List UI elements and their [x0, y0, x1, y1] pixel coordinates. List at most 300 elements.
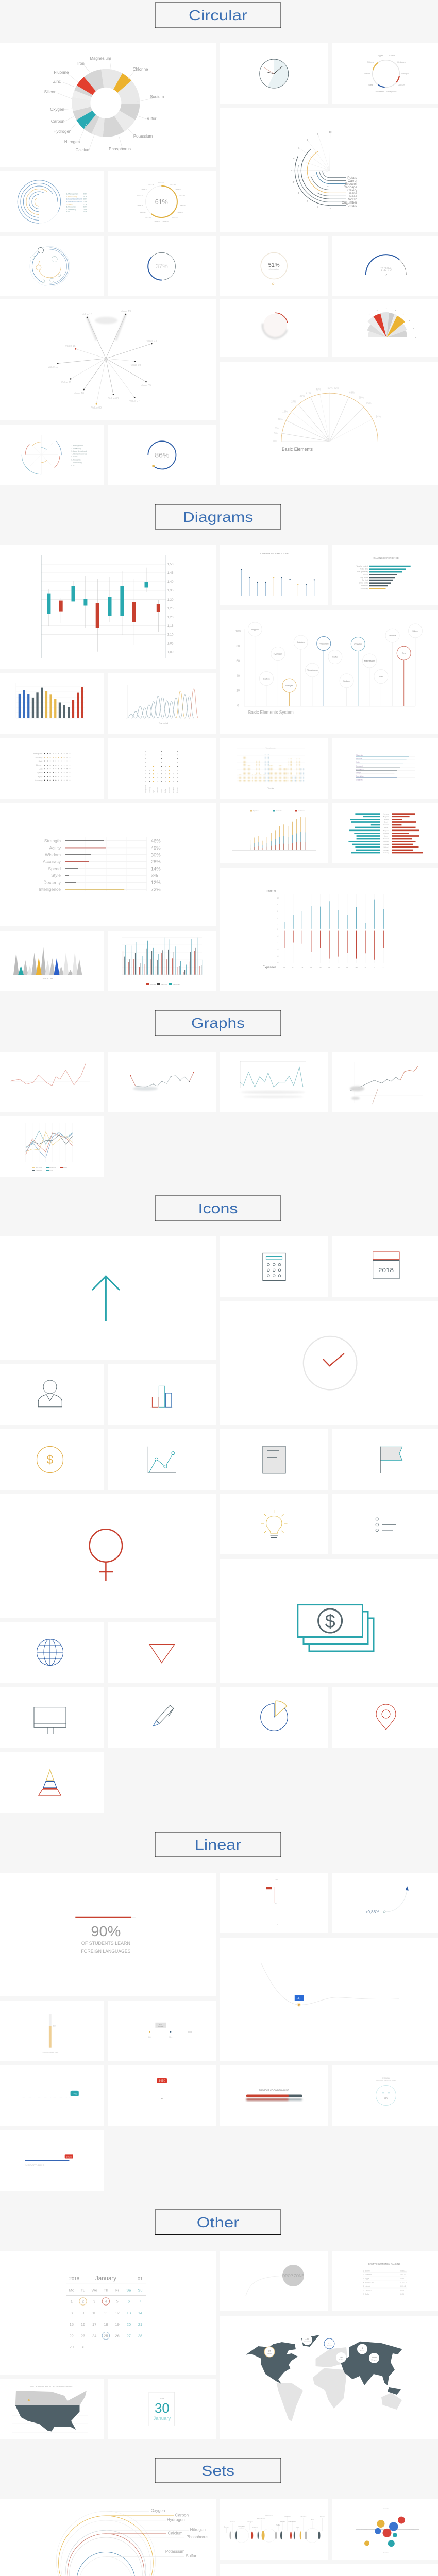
panel: +0,88% trend arrow: [332, 1873, 438, 1933]
panel: element lens timeline: Sodium: [280, 2520, 285, 2522]
panel: attribute percentage bars: [0, 803, 216, 926]
panel: world map: Mongolia: [371, 2359, 377, 2361]
panel: bubble quadrant chart: Growth: [383, 2507, 389, 2510]
panel: calendar January 2018: 6: [128, 2299, 130, 2304]
panel: gaming experience bars: Reactions: [361, 585, 368, 587]
heading: Linear: [155, 1832, 281, 1857]
panel: basic elements gauge: Basic Elements: [282, 447, 313, 452]
panel: butterfly bar chart: Serbia: [384, 826, 388, 828]
panel: income and expenses diverging bars: 4: [277, 917, 278, 919]
panel: element lens timeline: Carbon: [230, 2521, 235, 2523]
panel: butterfly bar chart: [332, 803, 438, 863]
panel: basic elements system balloons: Sulfur: [332, 655, 338, 658]
panel: curve with highlighted value: [220, 1938, 438, 2061]
panel: 61% ring with value labels: Value 02: [170, 184, 176, 186]
panel: 2018 calendar icon: [332, 1236, 438, 1297]
panel: cryptocurrency ranking: $0.55: [400, 2278, 404, 2280]
heading: Diagrams: [155, 504, 281, 529]
panel: basic elements system balloons: [220, 610, 438, 734]
panel: concentric vegetable arcs: [220, 108, 438, 232]
panel: 61% ring with value labels: Value 09: [154, 220, 160, 222]
panel: radial stems with value dots: Value 14: [146, 340, 157, 343]
panel: labelled line bars: Sales: [356, 761, 360, 764]
panel: radial progress rings with legend: 5. Sales: [66, 203, 73, 205]
panel: cryptocurrency ranking: CRYPTOCURRENCY RANKING: [368, 2263, 401, 2265]
panel: income and expenses diverging bars: -8: [277, 955, 279, 957]
panel: three series column chart: [108, 931, 216, 991]
panel: calendar January 2018: We: [92, 2287, 97, 2293]
panel: triangle column chart: [0, 931, 104, 991]
panel: attribute percentage bars: Wisdom: [45, 852, 61, 857]
panel: radial progress rings with legend: 76%: [83, 201, 87, 203]
panel: stacked money icon: [220, 1559, 438, 1683]
panel: multicolour bar chart: [0, 673, 104, 734]
heading: Icons: Icons: [198, 1200, 238, 1216]
panel: gaming experience bars: Community: [360, 587, 368, 589]
panel: income and expenses diverging bars: 10: [364, 967, 366, 969]
panel: calendar January 2018: 14: [138, 2311, 142, 2315]
panel: 37% ring: [108, 236, 216, 296]
panel: radial progress rings with legend: 8. IT: [66, 211, 70, 213]
panel: stacked spike chart: [220, 803, 328, 863]
panel: concentric vegetable arcs: Peas: [349, 195, 358, 198]
panel: basic elements gauge: 69%: [359, 396, 364, 399]
panel: concentric vegetable arcs: Cucumber: [342, 201, 358, 205]
panel: company income stem chart: COMPANY INCOME CHART: [259, 552, 290, 555]
panel: donut of elements: Sodium: [150, 95, 164, 99]
heading: Diagrams: Diagrams: [183, 509, 253, 525]
panel: dot matrix rows: Dexterity: [36, 756, 43, 758]
panel: dot matrix rows: Agility: [38, 775, 43, 777]
panel: concentric vegetable arcs: 3: [298, 192, 299, 194]
panel: vertical progress marker: 50: [275, 1902, 277, 1904]
panel: basic elements system balloons: Potassium: [319, 642, 329, 645]
panel: concentric vegetable arcs: 4: [293, 181, 294, 183]
panel: attribute percentage bars: 28%: [151, 859, 161, 865]
panel: donut of elements: Hydrogen: [54, 129, 71, 134]
panel: labelled line bars: [332, 738, 438, 799]
panel: project crowdfunding bar: [220, 2065, 328, 2126]
panel: radial stems with value dots: Value 15: [82, 313, 92, 316]
panel: radial stems with value dots: [0, 299, 216, 420]
panel: radial ring with element labels: Phosphorus: [386, 91, 397, 93]
panel: date card: 2018: [160, 2397, 165, 2400]
panel: attribute percentage bars: Style: [51, 873, 61, 878]
panel: calendar January 2018: 4: [105, 2299, 107, 2304]
panel: down triangle icon: [108, 1622, 216, 1683]
panel: radial stems with value dots: Value 12: [48, 366, 58, 369]
panel: bell curve chart: Time period: [159, 722, 168, 724]
panel: element lens timeline: Nitrogen: [247, 2521, 253, 2523]
panel: candlestick chart: 1,40: [167, 581, 174, 584]
panel: calendar January 2018: Fr: [115, 2287, 120, 2293]
panel: world map: Canada: [267, 2352, 272, 2354]
panel: date card: 30: [155, 2400, 170, 2416]
panel: smooth red line graph: [0, 1052, 104, 1112]
panel: radial stems with value dots: Value 11: [61, 381, 71, 384]
panel: world map: Turkey: [339, 2359, 344, 2361]
panel: income and expenses diverging bars: 08: [346, 967, 348, 969]
panel: nested circles of elements: Sulfur: [186, 2554, 197, 2558]
panel: basic elements gauge: 27%: [291, 401, 297, 404]
panel: income and expenses diverging bars: 6: [277, 910, 278, 912]
panel: calendar January 2018: Tu: [81, 2287, 85, 2293]
panel: range line with average: Average: [158, 2025, 164, 2027]
panel: concentric vegetable arcs: Beans: [348, 192, 358, 195]
panel: radial ring with element labels: Carbon: [389, 55, 395, 57]
panel: clock gauge: [220, 43, 328, 104]
panel: bubble quadrant chart: Low value: [361, 2528, 368, 2530]
panel: basic elements gauge: 63%: [349, 391, 355, 394]
heading: Circular: Circular: [189, 7, 247, 23]
panel: segmented radial arcs with legend: 2. Marketing: [71, 447, 81, 449]
panel: calendar January 2018: [0, 2251, 216, 2375]
panel: stacked spike chart: Unstable: [276, 810, 282, 812]
panel: 72% semicircular gauge: ♂: [384, 274, 388, 277]
panel: candlestick chart: 1,20: [167, 616, 174, 619]
panel: calendar January 2018: 18: [104, 2322, 108, 2327]
panel: basic elements system balloons: Calcium: [297, 641, 305, 643]
panel: concentric vegetable arcs: Potato: [347, 176, 357, 180]
panel: radial stems with value dots: Value 10: [74, 392, 84, 395]
panel: basic elements gauge: 5%: [274, 432, 278, 435]
panel: concentric vegetable arcs: 9: [317, 133, 319, 135]
panel: dollar coin icon: [0, 1429, 104, 1490]
heading: Graphs: [155, 1010, 281, 1036]
panel: dot matrix rows: Accuracy: [35, 779, 43, 782]
panel: 61% ring with value labels: Value 06: [177, 211, 183, 213]
panel: 61% ring with value labels: Value 11: [140, 211, 146, 213]
panel: multi-series line graph: Profit: [63, 1166, 67, 1168]
panel: donut of elements: Carbon: [51, 119, 64, 124]
panel: radial progress rings with legend: 64%: [83, 206, 87, 208]
panel: world map: Greenland: [304, 2341, 311, 2343]
panel: world map: Sweden: [327, 2345, 332, 2347]
panel: concentric vegetable arcs: 5: [291, 169, 293, 172]
panel: radial stems with value dots: Value 05: [141, 384, 151, 387]
heading: Sets: Sets: [201, 2463, 234, 2479]
panel: calendar January 2018: 1: [71, 2299, 73, 2304]
panel: 51% of population ring: of population: [269, 268, 279, 270]
panel: segmented radial arcs with legend: 8. IT: [71, 465, 75, 467]
panel: radial ring with element labels: Sulfur: [368, 84, 373, 86]
panel: income and expenses diverging bars: 0: [277, 928, 278, 930]
panel: USA map: [0, 2379, 104, 2439]
panel: concentric vegetable arcs: Broccoli: [345, 182, 357, 186]
panel: 61% ring with value labels: Value 15: [148, 184, 154, 186]
panel: calendar January 2018: 20: [127, 2322, 131, 2327]
panel: client satisfaction face: CLIENTS' SATISFACTION: [376, 2080, 396, 2082]
panel: calendar January 2018: 24: [92, 2333, 96, 2338]
panel: world map: 335: [339, 2356, 343, 2359]
panel: segmented radial arcs with legend: 7. Accounting: [71, 462, 82, 464]
panel: calendar January 2018: 22: [70, 2333, 74, 2338]
panel: project crowdfunding bar: PROJECT CROWDFUNDING: [259, 2089, 290, 2092]
panel: calendar January 2018: 8: [71, 2311, 73, 2315]
panel: candlestick chart: 1,15: [167, 625, 174, 628]
panel: vertical progress marker: [220, 1873, 328, 1933]
panel: world map: 77: [268, 2350, 271, 2352]
panel: donut of elements: Fluorine: [54, 70, 69, 75]
panel: three series column chart: Maximum: [173, 983, 180, 985]
panel: 61% ring with value labels: 61%: [155, 198, 168, 206]
panel: dot matrix rows: [0, 738, 104, 799]
panel: segmented radial arcs with legend: [0, 425, 104, 485]
panel: donut of elements: Phosphorus: [109, 147, 131, 151]
panel: cryptocurrency ranking: $0.26: [400, 2293, 404, 2295]
panel: basic elements system balloons: 80: [236, 645, 240, 648]
panel: 90% of students: 90%: [91, 1923, 121, 1939]
panel: income and expenses diverging bars: 2: [277, 924, 278, 926]
panel: cryptocurrency ranking: [332, 2251, 438, 2311]
panel: attribute percentage bars: Strength: [44, 838, 61, 843]
panel: radial stems with value dots: Value 16: [65, 345, 76, 348]
panel: element lens timeline: Oxygen: [224, 2526, 229, 2528]
panel: rising stock graph: [332, 1052, 438, 1112]
panel: radial ring with element labels: Potassium: [376, 91, 384, 93]
panel: faint ring with red arc: [220, 299, 328, 357]
panel: 72% semicircular gauge: 72%: [380, 266, 392, 273]
panel: candlestick chart: 1,30: [167, 599, 174, 602]
panel: dot matrix columns: Speed: [161, 789, 163, 793]
panel: range line with average: 100: [188, 2031, 192, 2034]
panel: map pin icon: [332, 1687, 438, 1748]
panel: gaming experience bars: Sound: [363, 573, 368, 575]
heading: Icons: [155, 1196, 281, 1221]
panel: income and expenses diverging bars: -10: [277, 962, 279, 964]
panel: butterfly bar chart: Poland: [384, 846, 389, 848]
panel: cryptocurrency ranking: 3. Ripple: [363, 2278, 369, 2280]
panel: 61% ring with value labels: Value 05: [180, 204, 186, 206]
panel: dot matrix rows: Style: [39, 760, 42, 762]
panel: 72% semicircular gauge: [332, 236, 438, 296]
panel: date card: January: [153, 2416, 171, 2421]
panel: attribute percentage bars: 46%: [151, 839, 161, 844]
panel: price tag on dashed line: [108, 2065, 216, 2126]
panel: basic elements system balloons: Fluorine: [389, 634, 397, 637]
panel: basic elements system balloons: Oxygen: [251, 628, 259, 631]
panel: radial progress rings with legend: 91%: [83, 196, 87, 198]
panel: multi-series line graph: Revenue: [49, 1166, 56, 1168]
panel: radial stems with value dots: Value 03: [130, 364, 141, 367]
panel: element lens timeline: Phosphorus: [257, 2518, 266, 2520]
panel: range line with average: 71.4: [169, 2036, 172, 2038]
panel: calendar January 2018: 11: [104, 2311, 108, 2315]
panel: income and expenses diverging bars: 10: [277, 897, 279, 899]
panel: basic elements system balloons: Sodium: [343, 680, 350, 682]
panel: teal wave graph: [220, 1052, 328, 1112]
panel: segmented radial arcs with legend: 5. Sales: [71, 456, 78, 458]
panel: radial ring with element labels: Nitrogen: [401, 73, 409, 75]
panel: dot matrix rows: Luck: [39, 768, 43, 770]
panel: radial progress rings with legend: 2. Accounting: [66, 196, 77, 198]
panel: calendar January 2018: 19: [115, 2322, 120, 2327]
panel: 90% of students: OF STUDENTS LEARN: [81, 1941, 130, 1946]
panel: radial ring with element labels: Hydrogen: [397, 61, 406, 63]
panel: nested circles of elements: Carbon: [175, 2513, 189, 2517]
panel: element lens timeline: Silicon: [320, 2516, 325, 2518]
panel: radial progress rings with legend: 6. Research: [66, 206, 76, 208]
panel: calendar January 2018: 13: [127, 2311, 131, 2315]
panel: butterfly bar chart: Belgium: [383, 829, 389, 832]
panel: butterfly bar chart: Australia: [383, 843, 389, 845]
panel: dotted column chart: [220, 738, 328, 799]
panel: gaming experience bars: Flying time: [360, 568, 368, 570]
panel: butterfly bar chart: Lebanon: [383, 818, 389, 820]
panel: segmented radial arcs with legend: 4. Human resources: [71, 453, 87, 455]
panel: radial ring with element labels: Chlorine: [367, 61, 374, 63]
panel: date card: [108, 2379, 216, 2439]
panel: 90% of students: FOREIGN LANGUAGES: [81, 1948, 130, 1954]
panel: calendar January 2018: 2: [82, 2299, 84, 2304]
panel: basic elements system balloons: 40: [236, 675, 240, 678]
panel: cryptocurrency ranking: $1,025.10: [400, 2282, 407, 2284]
panel: radial progress rings with legend: [0, 171, 104, 232]
panel: pen icon: [108, 1687, 216, 1748]
panel: candlestick chart: 1,25: [167, 607, 174, 611]
panel: gaming experience bars: Story mode: [360, 577, 368, 579]
panel: basic elements gauge: 50%: [328, 387, 333, 390]
panel: basic elements system balloons: Basic Elements System: [248, 710, 294, 715]
panel: radial ring with element labels: Sodium: [364, 73, 370, 75]
panel: radial progress rings with legend: 3. Legal department: [66, 198, 82, 200]
panel: candlestick chart: 1,45: [167, 572, 174, 575]
panel: pie chart icon: [220, 1687, 328, 1748]
panel: stacked money icon: $: [325, 1611, 335, 1632]
panel: dot matrix rows: Intelligence: [33, 753, 42, 755]
panel: 90% of students: [0, 1873, 216, 1996]
panel: dotted column chart: Tomato sales: [265, 747, 276, 749]
panel: income and expenses diverging bars: 01: [283, 967, 285, 969]
panel: calendar January 2018: 26: [115, 2333, 120, 2338]
panel: radial stems with value dots: Value 07: [129, 400, 140, 403]
panel: 86% ring: 86%: [155, 451, 169, 460]
panel: dotted progress with teal tag: [0, 2065, 104, 2126]
heading: Other: Other: [197, 2214, 239, 2230]
heading: Sets: [155, 2458, 281, 2483]
panel: calendar January 2018: 30: [81, 2345, 85, 2349]
panel: 61% ring with value labels: Value 04: [179, 195, 185, 197]
panel: radial stems with value dots: Value 09: [91, 406, 102, 410]
panel: butterfly bar chart: Romania: [383, 832, 389, 834]
panel: 37% ring: 37%: [156, 263, 168, 270]
panel: bubble quadrant chart: High value: [407, 2528, 414, 2530]
panel: gaming experience bars: Survival: [362, 579, 368, 581]
panel: drop zone placeholder: [220, 2251, 328, 2311]
panel: dot matrix columns: Wisdom: [169, 787, 171, 793]
panel: basic elements gauge: 75%: [366, 402, 372, 405]
panel: calendar January 2018: 3: [93, 2299, 95, 2304]
panel: nested circles of elements: [0, 2499, 216, 2576]
panel: cryptocurrency ranking: $155.42: [400, 2285, 406, 2287]
panel: 73% of the world's population: [220, 2564, 438, 2576]
panel: nested circles of elements: Nitrogen: [190, 2528, 206, 2532]
panel: gaming experience bars: Online ranks: [359, 582, 368, 584]
panel: concentric vegetable arcs: 6: [293, 157, 295, 160]
panel: income and expenses diverging bars: Expenses: [263, 966, 276, 969]
panel: butterfly bar chart: Germany: [383, 852, 389, 854]
panel: element lens timeline: Calcium: [252, 2527, 258, 2529]
panel: income and expenses diverging bars: 12: [382, 967, 384, 969]
panel: calendar January 2018: 23: [81, 2333, 85, 2338]
panel: world map: Russia: [360, 2350, 365, 2352]
panel: client satisfaction face: OVERALL: [382, 2077, 390, 2079]
panel: radial stems with value dots: Value 13: [121, 310, 131, 313]
panel: 86% ring: [108, 425, 216, 485]
panel: basic elements system balloons: Silicon: [412, 630, 418, 632]
panel: three series column chart: Average: [150, 983, 156, 985]
panel: concentric vegetable arcs: Radish: [347, 198, 357, 201]
panel: range line with average: [108, 2001, 216, 2061]
panel: multi-series line graph: Cost: [49, 1170, 53, 1172]
panel: bell curve chart: [108, 673, 216, 734]
panel: dot matrix columns: Dexterity: [148, 787, 150, 793]
panel: basic elements system balloons: Carbon: [263, 677, 270, 680]
panel: list icon: [332, 1494, 438, 1554]
panel: dot matrix columns: Strength: [172, 787, 174, 793]
panel: basic elements gauge: 0%: [273, 440, 277, 443]
panel: butterfly bar chart: Bulgaria: [383, 816, 389, 818]
panel: 61% ring with value labels: [108, 171, 216, 232]
panel: income and expenses diverging bars: 04: [310, 967, 312, 969]
panel: range line with average: 37.5: [159, 2023, 162, 2025]
panel: price tag on dashed line: $450: [159, 2080, 166, 2083]
panel: dotted line graph: [108, 1052, 216, 1112]
panel: basic elements gauge: 37%: [306, 392, 311, 395]
panel: person icon: [0, 1364, 104, 1425]
heading: Other: [155, 2210, 281, 2235]
panel: concentric vegetable arcs: 1: [317, 206, 319, 208]
panel: check mark icon: [220, 1301, 438, 1425]
panel: 61% ring with value labels: Value 12: [137, 204, 143, 206]
panel: vertical thermometer bar: [0, 2001, 104, 2061]
panel: labelled line bars: Shipping: [356, 779, 363, 781]
panel: calendar January 2018: Mo: [69, 2287, 74, 2293]
panel: basic elements gauge: 16%: [278, 418, 283, 421]
panel: candlestick chart: 1,05: [167, 642, 174, 645]
panel: +0,88% trend arrow: +0,88%: [365, 1910, 379, 1914]
panel: concentric vegetable arcs: 10: [329, 131, 332, 133]
panel: labelled line bars: Recruiting: [356, 775, 364, 777]
panel: income and expenses diverging bars: 05: [319, 967, 322, 969]
heading: Circular: [155, 3, 281, 28]
panel: dot matrix columns: Agility: [164, 789, 166, 793]
panel: concentric vegetable arcs: Celery: [347, 189, 358, 192]
panel: calendar January 2018: 29: [70, 2345, 74, 2349]
panel: bubble quadrant chart: [332, 2499, 438, 2560]
panel: attribute percentage bars: 14%: [151, 866, 161, 872]
panel: income and expenses diverging bars: -2: [277, 935, 279, 937]
panel: drop zone placeholder: DROP ZONE: [282, 2274, 304, 2278]
panel: element lens timeline: Zinc: [311, 2519, 314, 2521]
panel: nested circles of elements: Calcium: [168, 2531, 183, 2536]
panel: bubble quadrant chart: Decline: [383, 2552, 389, 2554]
panel: multi-series line graph: Expenses: [36, 1170, 43, 1172]
panel: basic elements system balloons: Chlorine: [354, 643, 362, 645]
panel: cryptocurrency ranking: 7. Stellar: [363, 2293, 370, 2295]
heading: Graphs: Graphs: [191, 1015, 245, 1031]
panel: concentric vegetable arcs: 2: [307, 200, 308, 202]
panel: radial progress rings with legend: 47%: [83, 211, 87, 213]
panel: gaming experience bars: Online gameplay: [356, 571, 368, 573]
panel: calendar January 2018: 17: [92, 2322, 96, 2327]
panel: donut of elements: Magnesium: [90, 56, 111, 61]
panel: attribute percentage bars: Agility: [49, 845, 61, 850]
panel: dot matrix columns: [108, 738, 216, 799]
panel: concentric vegetable arcs: Cabbage: [344, 185, 357, 189]
panel: income and expenses diverging bars: 11: [374, 967, 376, 969]
panel: performance bar: Performance: [25, 2164, 45, 2167]
